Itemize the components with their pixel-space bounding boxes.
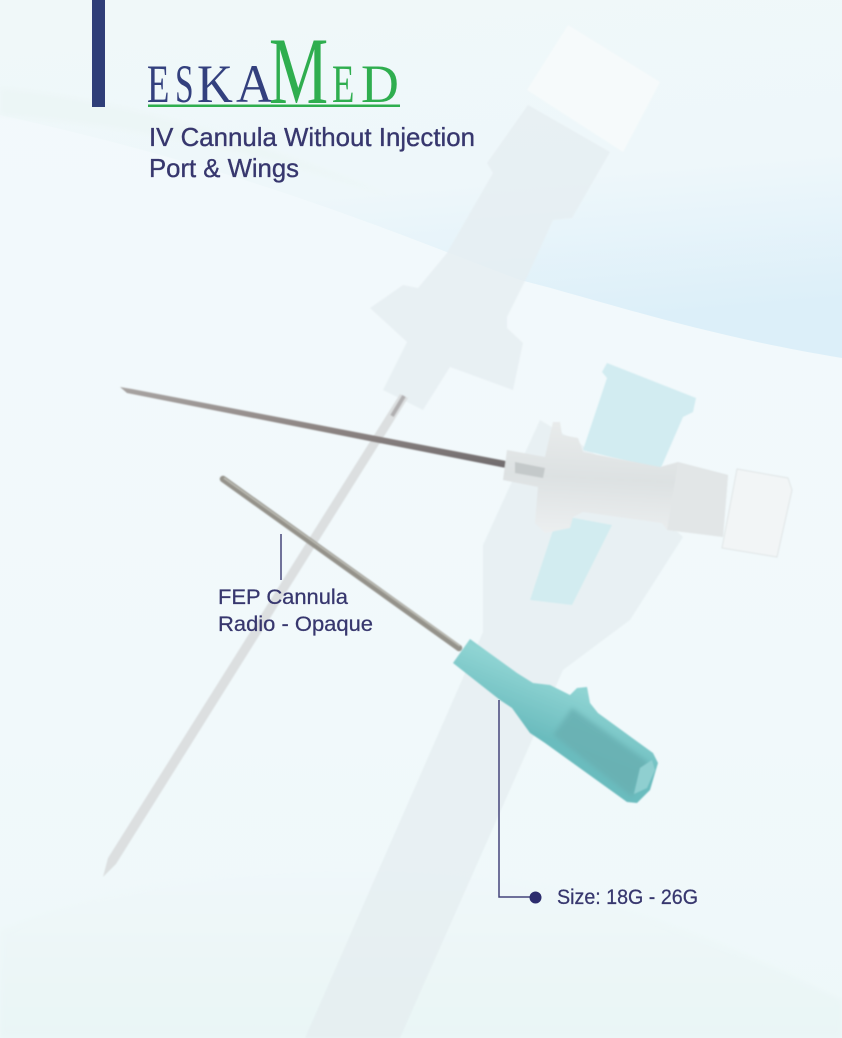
logo word: ESKA: E (147, 54, 169, 114)
leader dot (530, 892, 542, 904)
teal hub end (634, 760, 655, 794)
logo word: ESKA: K (197, 55, 233, 114)
hub inner shading (515, 462, 545, 478)
accent bar (92, 0, 105, 107)
title: Port & Wings (149, 153, 299, 183)
ghost shield body (305, 420, 683, 1038)
steel tube (223, 479, 459, 648)
white end cap (722, 469, 792, 557)
ghost teal cap (583, 363, 696, 470)
teal hub (453, 639, 658, 803)
logo word: ED: D (361, 54, 399, 114)
size label: Size: 18G - 26G (557, 886, 698, 909)
thin translucent FEP cannula (103, 394, 408, 877)
logo word: ED (332, 54, 399, 114)
callout: FEP cannula: Radio - Opaque (218, 613, 373, 636)
leader line (499, 700, 532, 897)
logo word: ESKA: S (175, 54, 194, 114)
title (149, 122, 475, 183)
steel needle (120, 387, 506, 468)
callout: size (499, 700, 698, 909)
transparent hub body (503, 422, 728, 537)
callout label: FEP Cannula (218, 586, 348, 609)
callout: FEP cannula (218, 534, 373, 636)
logo word: ESKA: A (236, 55, 273, 114)
logo word: ED: E (332, 54, 354, 114)
steel cannula tube with teal hub (223, 478, 658, 803)
ghost teal tube (530, 515, 612, 605)
teal hub darker barrel (553, 708, 648, 797)
leader line (280, 534, 282, 580)
logo letter: M: M (269, 18, 328, 124)
ghost cap (527, 25, 660, 152)
logo (147, 18, 400, 124)
logo underline (148, 104, 400, 107)
logo word: ESKA (147, 54, 273, 114)
title: IV Cannula Without Injection (149, 122, 475, 152)
needle with hub (120, 387, 792, 557)
ghost background cannula (white) (370, 25, 660, 410)
ghost background shield (teal and white) (305, 363, 696, 1038)
ghost body (370, 105, 610, 410)
